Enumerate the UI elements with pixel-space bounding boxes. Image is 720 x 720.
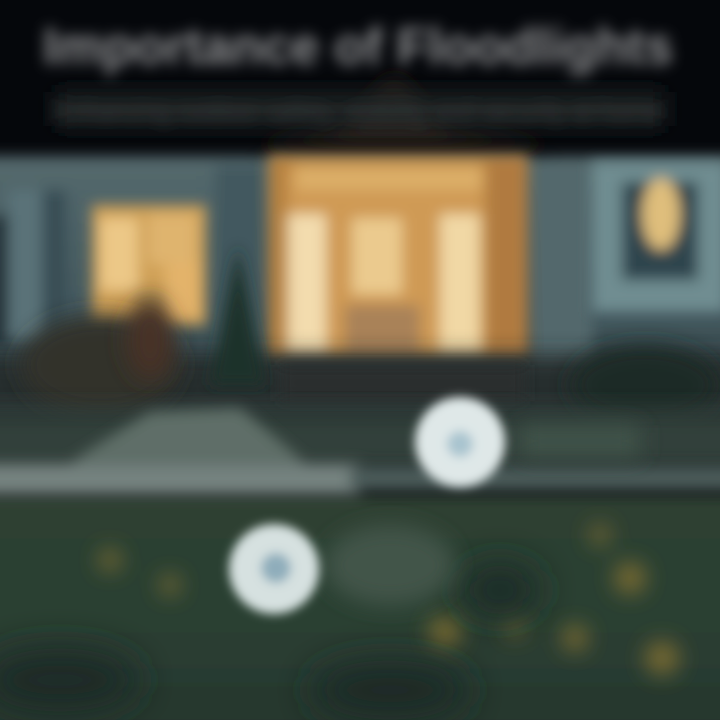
right window: framed glow <box>592 162 720 312</box>
lawn flowers <box>99 525 679 675</box>
background: night sky <box>0 0 720 160</box>
title: Importance of Floodlights <box>43 18 673 76</box>
marker: lower hotspot <box>229 524 319 614</box>
roof shadow above central window <box>250 76 560 146</box>
central window: warm glow <box>268 155 528 360</box>
dim subtitle band <box>55 92 665 126</box>
lawn <box>0 495 720 720</box>
house wall <box>0 156 720 416</box>
left window: warm glow <box>92 205 206 326</box>
subtitle: Enhancing outdoor safety, visibility and security at home <box>56 96 660 126</box>
dark grass patches <box>0 564 540 720</box>
path beyond marker <box>520 425 640 457</box>
shrubs and evergreen tree <box>0 245 720 425</box>
mid lawn band <box>0 410 720 472</box>
faint label patch beside marker <box>325 525 455 605</box>
marker: upper hotspot <box>415 397 505 487</box>
walkway <box>0 408 720 495</box>
